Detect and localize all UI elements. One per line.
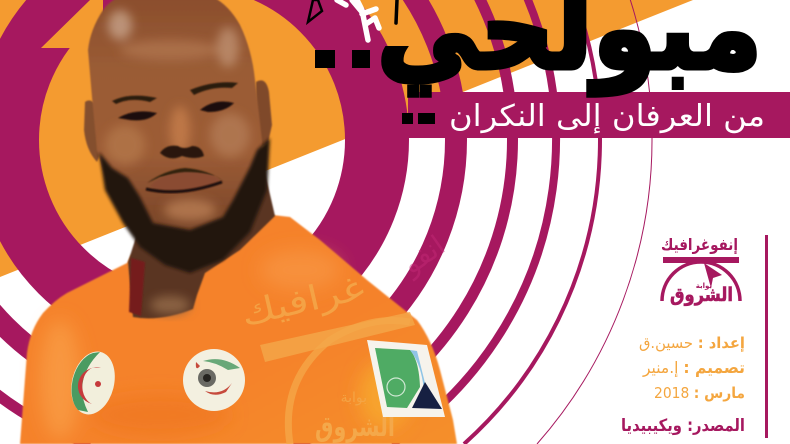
head and face [88, 0, 262, 250]
subtitle band [408, 92, 790, 138]
logo bar [663, 257, 739, 263]
inner collar red [129, 258, 145, 316]
right ear [256, 80, 272, 150]
shirt shading [40, 250, 411, 440]
credit: date: مارس : 2018 [654, 384, 745, 402]
head highlights [105, 10, 250, 221]
badge: federation crest [183, 349, 245, 411]
right brow [190, 82, 238, 95]
icon: runner [308, 0, 397, 40]
right eye [200, 102, 234, 112]
credit: prepared by: إعداد : حسين.ق [639, 334, 745, 352]
shirt [20, 215, 457, 444]
left ear [84, 100, 102, 162]
watermark: on shirt and rings: الشروق [315, 410, 395, 443]
credit: design: تصميم : إ.منير [642, 358, 745, 378]
lips [150, 172, 220, 191]
neck [128, 160, 275, 318]
watermark: on shirt and rings: انفو [394, 229, 451, 282]
logo heading: إنفوغرافيك [661, 235, 738, 254]
title dots [315, 50, 370, 68]
subtitle dots [402, 113, 435, 124]
badge: Algerian flag [65, 347, 121, 419]
logo portal name: بوابة [696, 282, 712, 290]
logo arc [662, 262, 740, 301]
watermark: on shirt and rings: غرافيك [237, 268, 368, 335]
nose [160, 146, 204, 158]
subtitle: من العرفان إلى النكران [449, 99, 765, 134]
arrow head on inner ring [41, 0, 103, 48]
logo cursor [704, 263, 722, 288]
player photo [20, 0, 457, 444]
credits logo [661, 235, 740, 306]
logo wordmark: الشروق [670, 284, 733, 306]
left brow [112, 96, 157, 104]
watermark: on shirt and rings [237, 229, 451, 444]
badge: sleeve patch [367, 340, 445, 417]
watermark: on shirt and rings: بوابة [341, 390, 367, 406]
moustache [147, 168, 224, 183]
vertical divider [765, 235, 768, 438]
beard [99, 138, 270, 273]
background: orange diagonal field [0, 0, 693, 277]
credit: source: المصدر: ويكيبيديا [621, 416, 745, 436]
left eye [118, 111, 157, 120]
neck highlight [150, 296, 190, 314]
